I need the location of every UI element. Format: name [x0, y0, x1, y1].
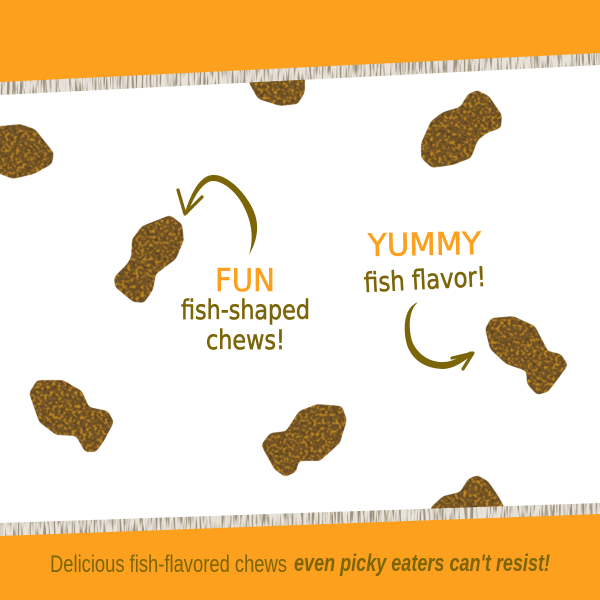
top fabric fringe	[0, 53, 600, 95]
fish chew: bottom left	[29, 380, 114, 452]
arrow: curved to right fish	[405, 302, 473, 369]
fish chew: centre left	[114, 215, 184, 303]
bottom fabric fringe	[0, 503, 600, 536]
bottom tagline	[50, 550, 550, 578]
fish chew: right	[485, 316, 568, 395]
text: fish-shaped: fish-shaped	[181, 295, 310, 326]
fish chew: top right	[421, 90, 502, 168]
fish chew: far left, cut by edge	[0, 124, 54, 179]
heading: YUMMY: YUMMY	[367, 226, 481, 264]
text: fish flavor!: fish flavor!	[363, 262, 487, 299]
bottom orange band	[0, 513, 600, 600]
fish chew: bottom right, partly hidden	[428, 475, 505, 520]
tagline: regular part: Delicious fish-flavored chews	[50, 551, 287, 578]
heading: FUN: FUN	[215, 263, 275, 299]
fish chew: top centre, partly hidden	[248, 70, 305, 106]
label: YUMMY fish flavor	[363, 226, 487, 299]
top orange band	[0, 0, 600, 83]
label: FUN fish-shaped chews	[181, 263, 310, 356]
fish chew: bottom centre	[261, 404, 347, 477]
arrow: curved to left fish	[178, 175, 257, 255]
text: chews!: chews!	[206, 325, 285, 356]
